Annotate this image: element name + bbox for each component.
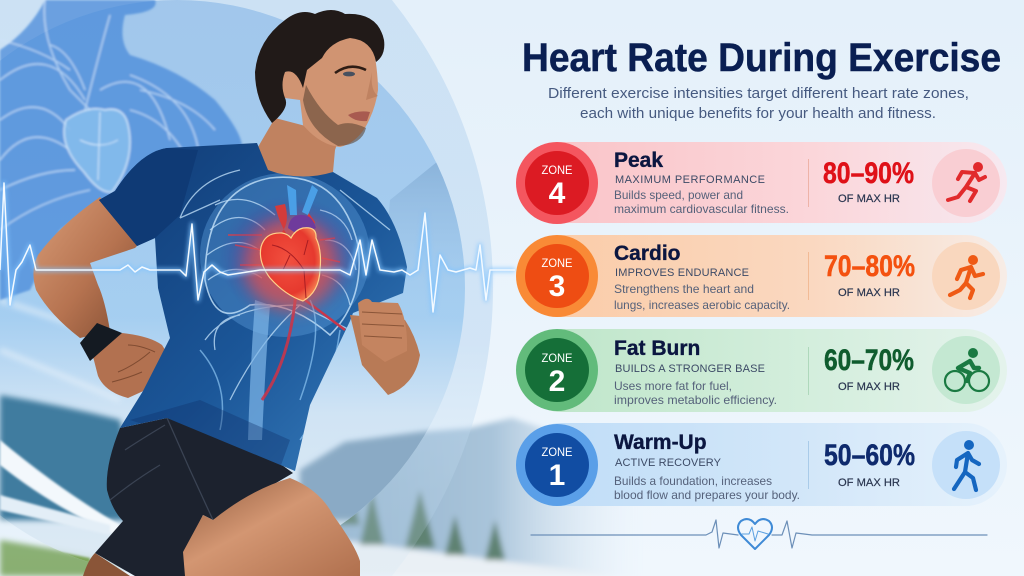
- left arm: [33, 197, 137, 338]
- intro text: Different exercise intensities target different heart rate zones,: [548, 85, 969, 102]
- panel: zone 2 fat burn: [516, 329, 1007, 412]
- facial features: [303, 67, 378, 146]
- zone badge: ZONE: [542, 445, 572, 459]
- heart rate range: OF MAX HR: [838, 287, 900, 299]
- outer halo circle: [0, 0, 520, 576]
- chest anatomy overlay: [130, 170, 390, 468]
- heart rate range: OF MAX HR: [838, 477, 900, 489]
- panel: zone 4 peak: [516, 142, 1007, 224]
- zone badge: ZONE: [542, 351, 572, 365]
- zone badge: ZONE: [542, 163, 572, 177]
- shorts: [95, 418, 293, 576]
- zone badge: 2: [549, 365, 565, 398]
- zone text: improves metabolic efficiency.: [614, 393, 777, 407]
- front thigh: [183, 478, 360, 576]
- intro text: [548, 85, 969, 122]
- ghost anatomy torso and heart: [0, 0, 242, 300]
- right forearm: [350, 315, 420, 395]
- zone text: Warm-Up: [614, 431, 707, 454]
- zone text: lungs, increases aerobic capacity.: [614, 298, 790, 312]
- zone badge: [516, 235, 598, 317]
- icon: runner: [932, 242, 1000, 310]
- zone text: MAXIMUM PERFORMANCE: [615, 174, 765, 186]
- smartwatch: [80, 323, 122, 361]
- zone badge: 4: [549, 177, 566, 210]
- back leg: [83, 553, 130, 576]
- zone text: ACTIVE RECOVERY: [615, 457, 722, 469]
- zone text: [614, 149, 789, 216]
- right fist: [358, 299, 407, 362]
- icon: heart outline: [738, 519, 772, 549]
- zone text: blood flow and prepares your body.: [614, 488, 800, 502]
- panel: zone 3 cardio: [516, 235, 1007, 317]
- zone text: IMPROVES ENDURANCE: [615, 267, 749, 279]
- title: Heart Rate During Exercise: [522, 36, 1001, 80]
- icon: sprinter: [932, 149, 1000, 217]
- zone badge: [516, 424, 598, 506]
- zone text: Builds a foundation, increases: [614, 474, 772, 488]
- face: [280, 37, 378, 147]
- icon: walker: [932, 431, 1000, 499]
- card background: [520, 235, 1007, 317]
- card background: [520, 423, 1007, 506]
- neck: [258, 118, 340, 178]
- intro text: each with unique benefits for your health and fitness.: [580, 105, 936, 122]
- zone badge: ZONE: [542, 256, 572, 270]
- zone badge: 1: [549, 459, 565, 492]
- heart rate range: 50–60%: [824, 439, 915, 472]
- left hand: [90, 333, 170, 398]
- shorts highlights: [110, 418, 213, 520]
- zone text: Cardio: [614, 242, 681, 265]
- heart rate range: OF MAX HR: [838, 381, 900, 393]
- card background: [520, 329, 1007, 412]
- zone text: BUILDS A STRONGER BASE: [615, 363, 765, 375]
- zone text: Peak: [614, 149, 663, 172]
- zone text: Uses more fat for fuel,: [614, 379, 732, 393]
- heart rate range: [823, 157, 914, 205]
- shirt sleeve shade: [99, 148, 198, 246]
- zone badge: 3: [549, 270, 565, 303]
- panel: zone 1 warm-up: [516, 423, 1007, 506]
- zone text: Fat Burn: [614, 337, 700, 360]
- zone text: Strengthens the heart and: [614, 282, 754, 296]
- zone text: [614, 431, 800, 502]
- heart rate range: OF MAX HR: [838, 193, 900, 205]
- hair: [255, 10, 384, 123]
- background landscape: [0, 409, 650, 576]
- heart rate range: 60–70%: [824, 344, 914, 377]
- card background: [520, 142, 1007, 223]
- anatomical heart: [245, 185, 337, 311]
- zone text: maximum cardiovascular fitness.: [614, 202, 789, 216]
- heart rate range: [824, 439, 915, 489]
- heart rate range: 80–90%: [823, 157, 914, 190]
- decorative heartbeat divider: [531, 519, 987, 549]
- heart rate range: [824, 250, 915, 299]
- zone text: [614, 242, 790, 312]
- ECG pulse line: [0, 183, 515, 312]
- runner: [33, 10, 420, 576]
- zone text: Builds speed, power and: [614, 188, 743, 202]
- heart rate range: [824, 344, 914, 393]
- zone badge: [516, 329, 598, 411]
- icon: cyclist: [932, 336, 1000, 404]
- inner sky circle: [0, 0, 465, 572]
- heart rate range: 70–80%: [824, 250, 915, 283]
- zone badge: [516, 142, 598, 224]
- shirt: [99, 143, 407, 471]
- zone text: [614, 337, 777, 407]
